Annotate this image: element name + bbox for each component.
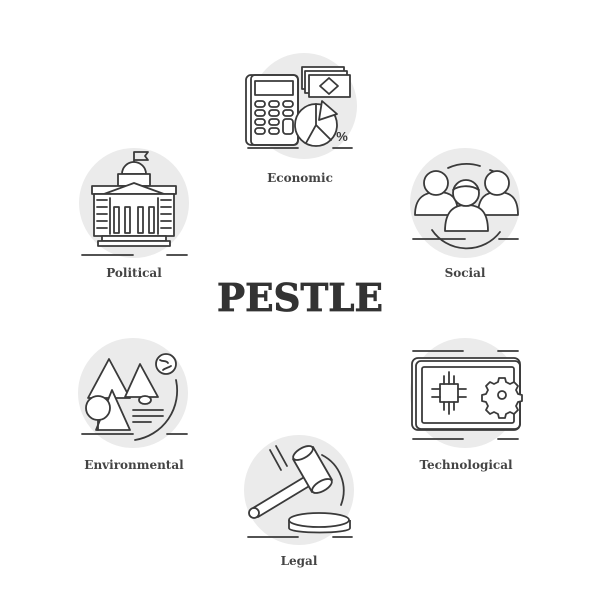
panel: technological	[410, 338, 522, 448]
panel: environmental	[78, 338, 188, 448]
icon: capitol building	[92, 152, 176, 246]
label: political: Political	[106, 266, 162, 280]
panel: political	[79, 148, 189, 258]
label: environmental: Environmental	[84, 458, 184, 472]
icon: nature	[86, 354, 177, 440]
panel: legal	[244, 435, 354, 545]
icon: money	[302, 67, 350, 97]
icon: pie chart: %	[336, 129, 348, 144]
icon: gavel	[249, 443, 350, 532]
label: economic: Economic	[267, 171, 333, 185]
icon: tablet with chip and gear	[412, 358, 522, 430]
label: social: Social	[445, 266, 486, 280]
panel: social	[410, 148, 520, 258]
panel: economic	[246, 53, 357, 159]
icon: calculator	[246, 75, 298, 145]
title: PESTLE	[217, 275, 383, 320]
label: technological: Technological	[419, 458, 513, 472]
icon: people	[415, 164, 518, 248]
label: legal: Legal	[281, 554, 318, 568]
